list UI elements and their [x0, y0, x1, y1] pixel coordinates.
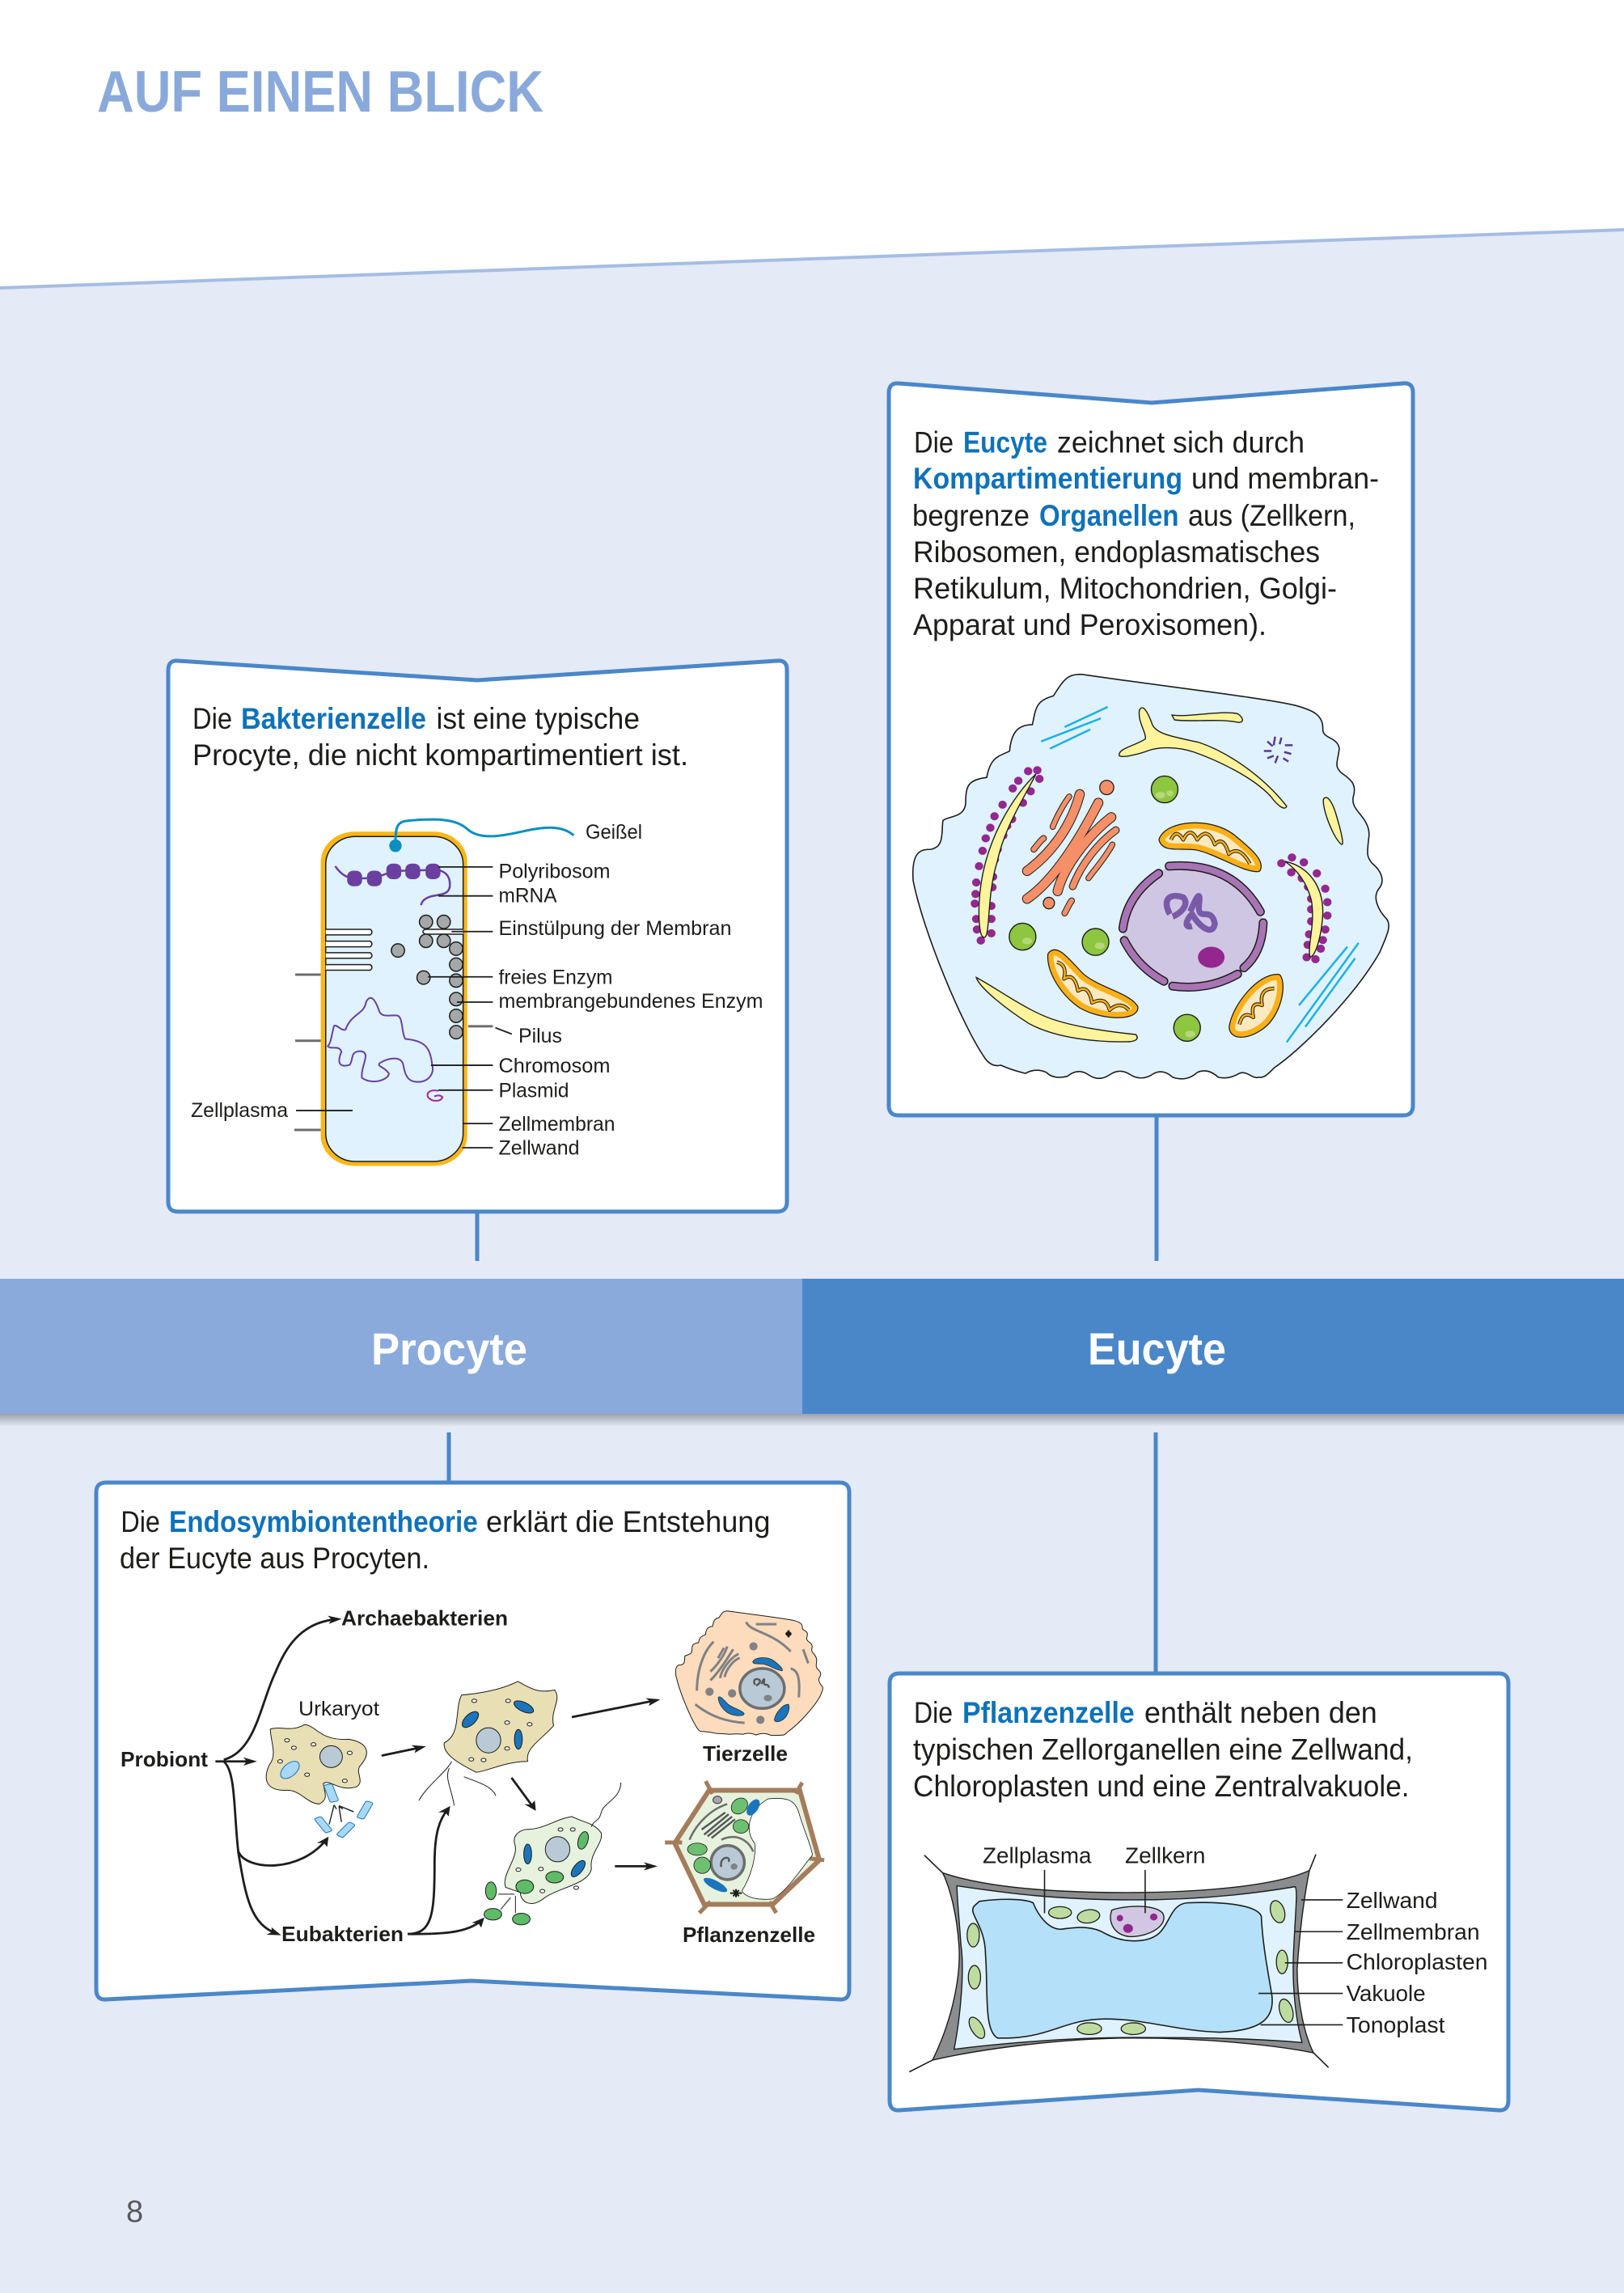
text: Eucyte: aus (Zellkern, [1188, 499, 1355, 532]
labels: plant cell: Tonoplast [1347, 2012, 1445, 2037]
diagram: bacterial cell [294, 819, 573, 1166]
cell: Urkaryot [266, 1724, 374, 1838]
panel: Eucyte [889, 383, 1413, 1115]
labels: plant cell: Zellplasma [983, 1842, 1092, 1868]
text: Eucyte [912, 426, 1379, 641]
text: Pflanzenzelle: enthält neben den [1144, 1696, 1377, 1729]
labels: bacterial cell: freies Enzym [498, 966, 613, 988]
text: Pflanzenzelle: Chloroplasten und eine Zentralvakuole. [913, 1770, 1410, 1803]
labels: endosymbiosis: Archaebakterien [341, 1606, 508, 1630]
text: Bakterienzelle: ist eine typische [437, 702, 640, 735]
text: Pflanzenzelle: Pflanzenzelle [962, 1696, 1135, 1729]
labels: endosymbiosis: Probiont [121, 1747, 208, 1771]
text: Pflanzenzelle: typischen Zellorganellen eine Zellwand, [913, 1733, 1413, 1766]
cell: early plant cell [484, 1783, 621, 1925]
text: Eucyte: und membran- [1191, 462, 1379, 495]
connector lines [449, 1115, 1157, 1673]
panel: Endosymbiontentheorie [96, 1483, 849, 1999]
labels: plant cell: Vakuole [1347, 1981, 1426, 2006]
text: Eucyte: Apparat und Peroxisomen). [913, 608, 1267, 641]
text: Pflanzenzelle [913, 1696, 1413, 1803]
labels: plant cell [983, 1842, 1488, 2037]
text: Eucyte: Retikulum, Mitochondrien, Golgi- [913, 572, 1337, 605]
category band: Eucyte: Eucyte [1088, 1323, 1226, 1374]
text: Endosymbiontentheorie: erklärt die Entstehung [486, 1505, 770, 1538]
labels: plant cell: Zellkern [1125, 1842, 1205, 1868]
labels: endosymbiosis: Eubakterien [281, 1922, 404, 1946]
arrows: evolution paths [215, 1619, 657, 1934]
category band: Eucyte [802, 1279, 1624, 1414]
panel: Bakterienzelle [168, 661, 787, 1212]
diagram: animal cell [913, 675, 1389, 1079]
labels: bacterial cell: mRNA [498, 885, 557, 907]
text: Eucyte: Die [914, 426, 954, 459]
text: Bakterienzelle: Procyte, die nicht kompartimentiert ist. [192, 738, 688, 772]
text: Bakterienzelle: Bakterienzelle [241, 702, 426, 735]
labels: endosymbiosis: Tierzelle [703, 1741, 788, 1766]
cell: intermediate [419, 1682, 557, 1805]
labels: plant cell: Chloroplasten [1347, 1949, 1488, 1974]
labels: bacterial cell: Zellplasma [191, 1099, 288, 1122]
labels: bacterial cell: Polyribosom [498, 861, 610, 883]
header diagonal line [0, 230, 1624, 288]
text: Pflanzenzelle: Die [914, 1696, 953, 1729]
text: Endosymbiontentheorie: Die [121, 1505, 160, 1538]
labels: bacterial cell: Zellmembran [498, 1113, 615, 1136]
labels: bacterial cell [191, 821, 763, 1160]
band shadow [0, 1414, 1624, 1427]
cell: plant cell mini [665, 1781, 824, 1913]
text: Bakterienzelle: Die [192, 702, 232, 735]
labels: bacterial cell: Einstülpung der Membran [498, 917, 731, 940]
text: Eucyte: Kompartimentierung [913, 462, 1182, 495]
text: Endosymbiontentheorie: der Eucyte aus Procyten. [120, 1542, 429, 1575]
text: Endosymbiontentheorie [120, 1505, 770, 1575]
labels: endosymbiosis [121, 1606, 815, 1947]
labels: bacterial cell: membrangebundenes Enzym [498, 990, 763, 1013]
text: Eucyte: zeichnet sich durch [1057, 426, 1305, 459]
labels: plant cell: Zellwand [1347, 1888, 1438, 1913]
labels: endosymbiosis: Pflanzenzelle [683, 1923, 815, 1947]
labels: plant cell: Zellmembran [1347, 1919, 1480, 1944]
labels: bacterial cell: Pilus [518, 1025, 562, 1047]
panel: Pflanzenzelle [890, 1673, 1508, 2110]
text: Eucyte: Organellen [1039, 499, 1179, 532]
text: Endosymbiontentheorie: Endosymbiontentheorie [169, 1505, 478, 1538]
labels: bacterial cell: Zellwand [498, 1137, 579, 1160]
cell: animal cell mini [675, 1611, 823, 1736]
labels: bacterial cell: Plasmid [498, 1079, 569, 1102]
diagram: endosymbiosis flow [215, 1611, 824, 1934]
text: Eucyte: begrenze [912, 499, 1030, 532]
title: AUF EINEN BLICK [97, 60, 543, 125]
category band: Procyte: Procyte [371, 1323, 527, 1374]
diagram: plant cell [909, 1855, 1343, 2072]
page number: 8 [126, 2195, 143, 2229]
labels: bacterial cell: Geißel [586, 821, 642, 844]
labels: endosymbiosis: Urkaryot [298, 1698, 379, 1720]
text: Bakterienzelle [192, 702, 688, 772]
labels: bacterial cell: Chromosom [498, 1055, 610, 1077]
category band: Procyte [0, 1279, 802, 1414]
text: Eucyte: Ribosomen, endoplasmatisches [913, 535, 1320, 569]
text: Eucyte: Eucyte [963, 426, 1047, 459]
